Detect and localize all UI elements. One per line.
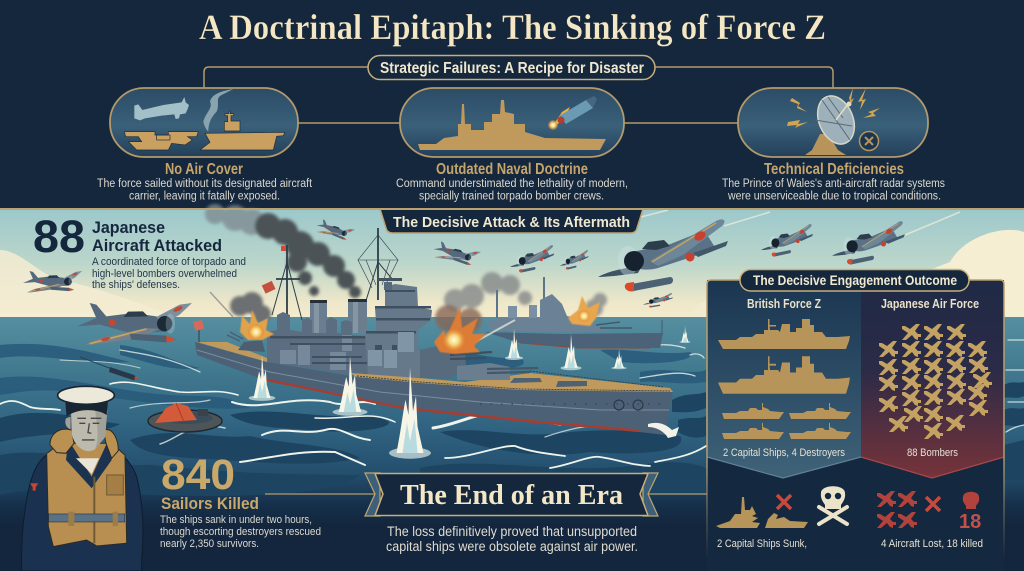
main battleship — [193, 228, 673, 435]
text: outdated naval doctrine: Outdated Naval Doctrine — [436, 161, 588, 178]
icon: battleship silhouette — [418, 100, 606, 150]
life raft — [148, 403, 222, 432]
text: technical deficiencies — [722, 161, 945, 202]
force counts: 2 Capital Ships, 4 Destroyers — [723, 447, 845, 459]
title: A Doctrinal Epitaph: The Sinking of Force Z — [199, 7, 826, 47]
face — [71, 410, 107, 451]
stat: 840 sailors killed: nearly 2,350 survivors. — [160, 538, 259, 550]
deck rail — [357, 371, 670, 391]
stat: 840 sailors killed: though escorting destroyers rescued — [160, 526, 321, 538]
smoke plumes — [205, 204, 607, 332]
plane: large foreground left — [77, 303, 192, 345]
gold rules beside banner — [265, 493, 707, 495]
force counts — [723, 447, 958, 459]
scene: sky — [0, 209, 1024, 319]
icon: red cross japanese — [926, 497, 940, 511]
torpedo in water — [80, 357, 138, 380]
icon: plane overhead — [134, 97, 189, 120]
flow connectors: strategic failures — [204, 67, 833, 123]
panel: the decisive engagement outcome — [707, 270, 1004, 571]
text: conclusion: The loss definitively proved that unsupported — [387, 524, 637, 539]
loss captions: 4 Aircraft Lost, 18 killed — [881, 538, 983, 550]
icon: torpedo and blast — [548, 96, 597, 130]
panel title: The Decisive Engagement Outcome — [753, 272, 957, 288]
rigging and masts — [272, 228, 398, 320]
attacking planes — [23, 218, 905, 380]
text: technical deficiencies: Technical Deficiencies — [764, 161, 904, 178]
icon: red skull and count — [959, 492, 981, 533]
aft superstructure — [267, 312, 372, 378]
distant ship: second capital ship — [475, 277, 663, 348]
stat: 88 aircraft attacked: the ships' defenses. — [92, 279, 180, 291]
icon: sunk british ships — [716, 497, 808, 528]
british column — [707, 280, 861, 478]
japanese column — [861, 280, 1004, 478]
water spouts — [249, 326, 691, 459]
top navy panel background — [0, 0, 1024, 209]
anchors — [614, 400, 643, 410]
text: technical deficiencies: The Prince of Wales's anti-aircraft radar systems — [722, 178, 945, 190]
life vest — [47, 443, 127, 547]
text: no air cover — [97, 161, 313, 202]
loss captions: 2 Capital Ships Sunk, — [717, 538, 807, 550]
hood — [50, 429, 118, 458]
column headings — [747, 296, 979, 311]
text: technical deficiencies: were unserviceable due to tropical conditions. — [727, 190, 941, 202]
text: outdated naval doctrine: specially trained torpado bomber crews. — [419, 190, 604, 202]
icon: lightning bolts — [787, 88, 880, 128]
scene: sea — [0, 317, 1024, 571]
stat: 840 sailors killed — [160, 451, 321, 550]
force counts: 88 Bombers — [907, 447, 958, 459]
stat: 88 aircraft attacked: Japanese — [92, 218, 165, 237]
stat: 840 sailors killed: 840 — [161, 451, 235, 499]
stat: 88 aircraft attacked: Aircraft Attacked — [92, 236, 222, 255]
stat: 88 aircraft attacked: 88 — [33, 211, 85, 262]
icon: skull and crossbones — [819, 486, 847, 524]
banner: the end of an era — [365, 473, 658, 516]
column headings: Japanese Air Force — [881, 296, 979, 311]
icon: red cross british — [777, 495, 791, 509]
cap — [65, 398, 108, 417]
stat: 88 aircraft attacked: high-level bombers overwhelmed — [92, 268, 237, 280]
heading: the decisive attack and its aftermath: The Decisive Attack & Its Aftermath — [393, 214, 630, 231]
vest details — [91, 477, 97, 543]
stat: 840 sailors killed: The ships sank in under two hours, — [160, 514, 312, 526]
text: outdated naval doctrine — [396, 161, 628, 202]
icons: british fleet — [718, 319, 851, 439]
wooden decks — [197, 342, 673, 392]
text: no air cover: No Air Cover — [165, 161, 243, 178]
loss captions — [717, 538, 983, 550]
section heading: strategic failures: Strategic Failures: A Recipe for Disaster — [380, 60, 644, 77]
panel: outdated naval doctrine — [400, 88, 624, 157]
text: conclusion: capital ships were obsolete against air power. — [386, 539, 638, 554]
explosions on ships — [210, 292, 600, 354]
hull — [195, 342, 673, 435]
icon: failure mark — [860, 132, 878, 150]
text: conclusion — [386, 524, 638, 554]
icon: red skull and count: 18 — [959, 511, 981, 533]
bow wave — [648, 423, 679, 438]
plane: large foreground right — [598, 219, 728, 291]
stat: 88 aircraft attacked — [33, 211, 246, 291]
funnels — [310, 299, 367, 336]
text: outdated naval doctrine: Command understimated the lethality of modern, — [396, 178, 628, 190]
jacket — [22, 448, 143, 571]
icons: aircraft lost — [877, 491, 917, 528]
panel title — [740, 270, 969, 291]
shirt collar — [66, 440, 112, 488]
sailor portrait — [22, 386, 143, 571]
flags — [193, 246, 286, 344]
icon: radar dish — [805, 90, 861, 155]
icons: japanese bombers — [879, 324, 992, 439]
stat: 88 aircraft attacked: A coordinated force of torpado and — [92, 256, 246, 268]
plane: far left — [23, 271, 82, 292]
icon: smoke wisp — [203, 89, 233, 132]
banner: the end of an era: The End of an Era — [400, 479, 623, 511]
stat: 840 sailors killed: Sailors Killed — [161, 494, 259, 513]
text: no air cover: carrier, leaving it fatally exposed. — [129, 190, 280, 202]
heading: the decisive attack and its aftermath — [380, 209, 643, 233]
bridge tower — [365, 284, 445, 378]
panel: technical deficiencies — [738, 88, 928, 157]
icon: broken carrier — [124, 111, 285, 150]
text: no air cover: The force sailed without its designated aircraft — [97, 178, 313, 190]
section heading: strategic failures — [368, 56, 655, 80]
turrets and guns — [227, 332, 587, 387]
gold divider between sections — [0, 208, 1024, 210]
panel: no air cover — [110, 88, 298, 157]
column headings: British Force Z — [747, 296, 821, 311]
